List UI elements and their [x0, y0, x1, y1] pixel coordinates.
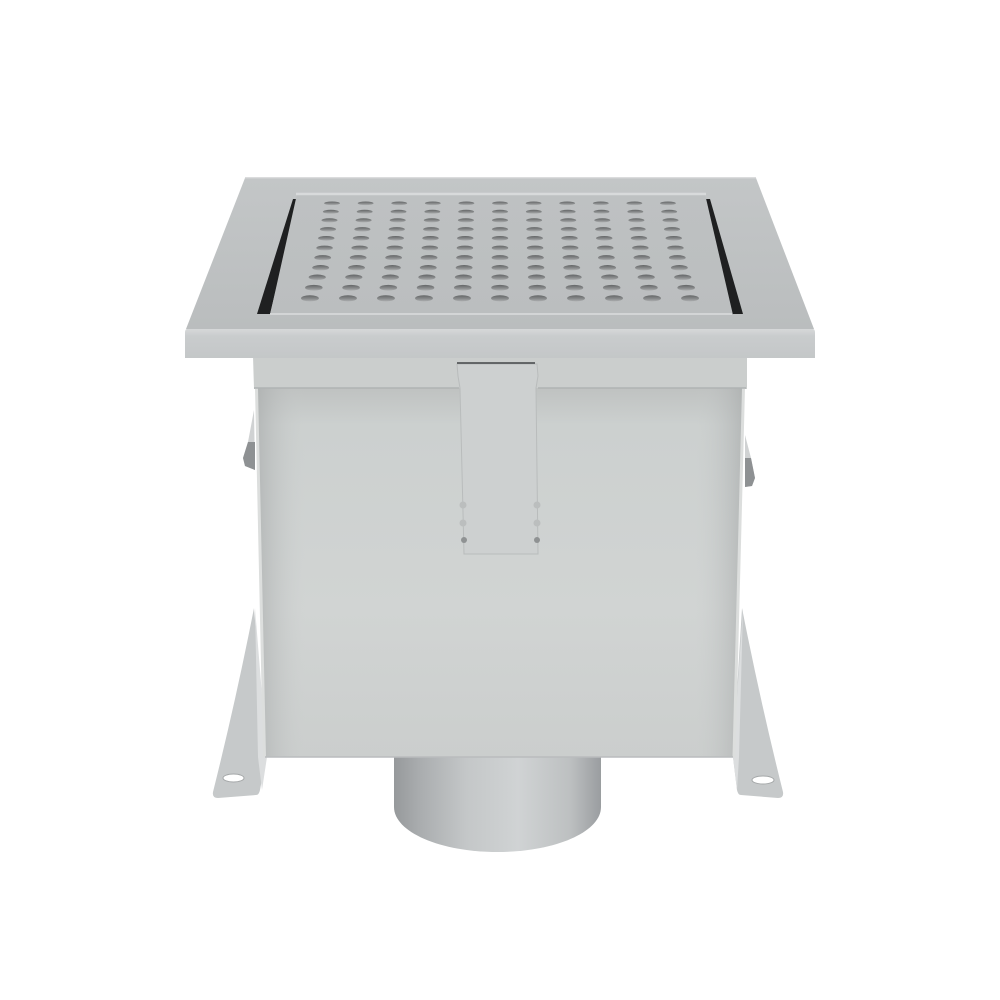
right mounting foot: [733, 608, 783, 798]
right drain slot: [703, 199, 743, 314]
front retaining strap: [457, 363, 540, 554]
perforated grate: [270, 194, 733, 315]
left mounting foot: [213, 608, 267, 798]
top flange: [186, 178, 814, 329]
left drain slot: [257, 199, 298, 314]
box upper band: [253, 356, 747, 389]
box front panel: [254, 388, 746, 757]
flange front lip: [185, 329, 815, 358]
right side latch: [745, 435, 755, 487]
left side latch: [243, 410, 255, 470]
grate holes: [301, 201, 699, 301]
outlet pipe: [394, 750, 601, 852]
